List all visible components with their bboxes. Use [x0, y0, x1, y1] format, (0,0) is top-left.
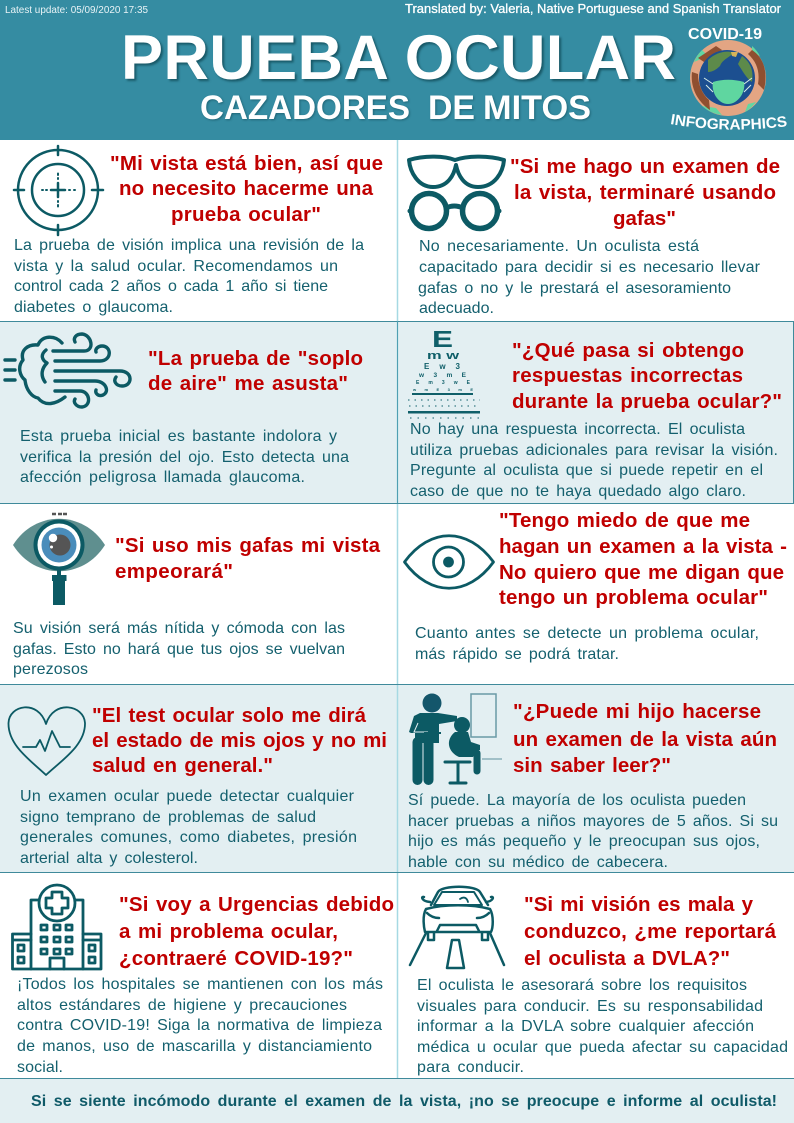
body text: No necesariamente. Un oculista está	[419, 238, 699, 255]
logo: COVID-19 infographics globe	[671, 26, 787, 130]
panel: miedo a un problema ocular	[404, 509, 787, 663]
panel: urgencias y COVID-19	[12, 885, 394, 1076]
icon: heart with pulse	[8, 707, 85, 775]
body text: generales comunes, como diabetes, presión	[20, 829, 357, 846]
heading: "Tengo miedo de que me	[499, 509, 750, 532]
body text: Pregunte al oculista que si puede repetir en el	[410, 462, 763, 479]
heading: sin saber leer?"	[513, 754, 671, 777]
heading: durante la prueba ocular?"	[512, 390, 782, 413]
icon: eye chart: E w 3	[424, 362, 461, 371]
heading: la vista, terminaré usando	[514, 181, 776, 204]
body text: control cada 2 años o cada 1 año si tiene	[14, 278, 328, 295]
subtitle: CAZADORES	[200, 89, 410, 127]
panel: terminaré usando gafas	[409, 155, 780, 317]
body text: perezosos	[13, 661, 88, 678]
heading: de aire" me asusta"	[148, 372, 348, 395]
heading	[510, 155, 780, 230]
body text: capacitado para decidir si es necesario llevar	[419, 259, 761, 276]
body text: Su visión será más nítida y cómoda con las	[13, 620, 345, 637]
heading: no necesito hacerme una	[119, 177, 374, 200]
heading	[524, 893, 777, 970]
body text: adecuado.	[419, 300, 494, 317]
body text: para conducir.	[417, 1059, 524, 1076]
heading	[512, 339, 782, 413]
body text	[17, 976, 383, 1076]
heading: "Si me hago un examen de	[510, 155, 780, 178]
footer message: Si se siente incómodo durante el examen de la vista, ¡no se preocupe e informe al oculista!	[31, 1093, 777, 1110]
body text: caso de que no te haya quedado algo claro.	[410, 483, 746, 500]
heading	[499, 509, 787, 609]
logo: COVID-19 infographics globe: COVID-19	[688, 26, 762, 43]
body text	[20, 428, 349, 486]
icon: eye chart: m w	[427, 350, 460, 362]
heading: el oculista a DVLA?"	[524, 947, 730, 970]
heading: empeorará"	[115, 560, 233, 583]
body text: hable con su médico de cabecera.	[408, 854, 668, 871]
icon: eye chart	[408, 326, 480, 418]
body text	[13, 620, 345, 678]
body text: informar a la DVLA sobre cualquier afección	[417, 1018, 754, 1035]
icon: hospital	[12, 885, 101, 969]
body text: de manos, uso de mascarilla y distanciamiento	[17, 1038, 372, 1055]
subtitle: MITOS	[483, 89, 591, 127]
panel: conducir y DVLA	[410, 887, 788, 1076]
heading: respuestas incorrectas	[512, 364, 743, 387]
icon: target	[14, 146, 103, 235]
heading	[92, 704, 387, 777]
logo: COVID-19 infographics globe: INFOGRAPHICS	[671, 114, 787, 130]
icon: optician examining child	[409, 694, 502, 783]
panel: soplo de aire	[5, 334, 363, 486]
icon: car on road	[410, 887, 504, 968]
body text: Sí puede. La mayoría de los oculista pueden	[408, 792, 746, 809]
heading	[115, 534, 381, 583]
heading: hagan un examen a la vista -	[499, 535, 787, 558]
icon: brain and air stream	[5, 334, 130, 407]
body text	[418, 238, 761, 317]
body text: hijo es más pequeño y le preocupan sus ojos,	[408, 833, 760, 850]
heading: prueba ocular"	[171, 203, 321, 226]
heading: gafas"	[613, 207, 676, 230]
icon: two pairs of glasses	[409, 157, 504, 228]
body text: ¡Todos los hospitales se mantienen con los más	[17, 976, 383, 993]
body text: social.	[17, 1059, 63, 1076]
heading: "Mi vista está bien, así que	[110, 152, 383, 175]
heading: "Si uso mis gafas mi vista	[115, 534, 381, 557]
header banner	[0, 0, 794, 140]
heading: el estado de mis ojos y no mi	[92, 729, 387, 752]
heading: "La prueba de "soplo	[148, 347, 363, 370]
panel: salud en general	[8, 704, 387, 867]
heading: un examen de la vista aún	[513, 728, 777, 751]
body text: signo temprano de problemas de salud	[20, 809, 316, 826]
body text: Un examen ocular puede detectar cualquier	[20, 788, 355, 805]
body text: El oculista le asesorará sobre los requisitos	[417, 977, 747, 994]
icon: eye chart: w m E 3 m E	[412, 387, 473, 392]
subtitle: DE	[428, 89, 475, 127]
panel: hijo sin saber leer	[408, 694, 778, 871]
body text: verifica la presión del ojo. Esto detecta una	[20, 449, 349, 466]
body text: afección peligrosa llamada glaucoma.	[20, 469, 305, 486]
body text: gafas o no y le prestará el asesoramiento	[418, 280, 731, 297]
icon: eye chart: E	[432, 326, 453, 352]
body text: La prueba de visión implica una revisión de la	[14, 237, 364, 254]
icon: eye chart: E m 3 w E	[416, 380, 471, 386]
translator credit: Translated by: Valeria, Native Portuguese and Spanish Translator	[405, 1, 782, 16]
body text: contra COVID-19! Siga la normativa de limpieza	[17, 1017, 382, 1034]
body text	[410, 421, 778, 500]
update timestamp: Latest update: 05/09/2020 17:35	[5, 5, 148, 16]
body text: arterial alta y colesterol.	[20, 850, 198, 867]
body text: médica u ocular que pueda afectar su capacidad	[417, 1039, 788, 1056]
body text: Cuanto antes se detecte un problema ocular,	[415, 625, 759, 642]
panel: vista bien	[14, 146, 383, 316]
body text: No hay una respuesta incorrecta. El oculista	[410, 421, 745, 438]
title: PRUEBA OCULAR	[121, 23, 676, 93]
heading: "¿Qué pasa si obtengo	[512, 339, 744, 362]
panel: respuestas incorrectas	[408, 326, 782, 500]
icon: eye under magnifier	[13, 514, 105, 605]
heading: No quiero que me digan que	[499, 561, 784, 584]
body text: vista y la salud ocular. Recomendamos un	[14, 258, 338, 275]
body text: visuales para conducir. Es su responsabilidad	[417, 998, 763, 1015]
heading: ¿contraeré COVID-19?"	[119, 947, 353, 970]
body text: Esta prueba inicial es bastante indolora y	[20, 428, 337, 445]
heading: "¿Puede mi hijo hacerse	[513, 700, 761, 723]
body text	[408, 792, 778, 871]
body text: gafas. Esto no hará que tus ojos se vuelvan	[13, 641, 345, 658]
body text	[415, 625, 759, 663]
body text: utiliza pruebas adicionales para revisar la visión.	[410, 442, 778, 459]
heading: "Si voy a Urgencias debido	[119, 893, 394, 916]
heading: conduzco, ¿me reportará	[524, 920, 777, 943]
heading	[513, 700, 777, 777]
body text: hacer pruebas a niños mayores de 5 años. Si su	[408, 813, 778, 830]
panel: gafas empeorará	[13, 514, 381, 678]
icon: eye chart: w 3 m E	[418, 372, 467, 379]
heading	[119, 893, 394, 970]
body text	[14, 237, 364, 316]
body text: diabetes o glaucoma.	[14, 299, 173, 316]
subtitle	[200, 89, 591, 127]
heading: "Si mi visión es mala y	[524, 893, 754, 916]
heading: a mi problema ocular,	[119, 920, 338, 943]
icon: eye	[404, 536, 494, 588]
body text: altos estándares de higiene y precauciones	[17, 997, 347, 1014]
heading	[110, 152, 383, 226]
heading: "El test ocular solo me dirá	[92, 704, 367, 727]
heading: tengo un problema ocular"	[499, 586, 768, 609]
body text: más rápido se podrá tratar.	[415, 646, 619, 663]
body text	[417, 977, 788, 1076]
body text	[20, 788, 357, 867]
heading	[148, 347, 363, 395]
heading: salud en general."	[92, 754, 273, 777]
